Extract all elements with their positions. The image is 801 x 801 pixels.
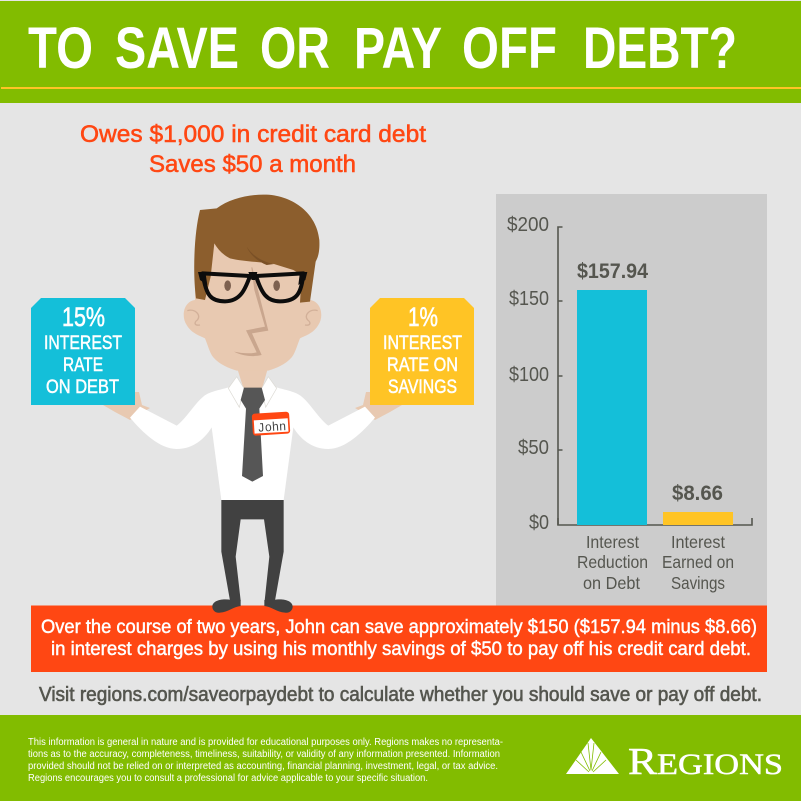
title: [28, 16, 737, 81]
disclaimer: This information is general in nature and is provided for educational purposes only. Regions makes no representa-: [28, 737, 503, 748]
tag: debt interest rate: RATE: [63, 355, 103, 376]
disclaimer: tions as to the accuracy, completeness, timeliness, suitability, or validity of any information presented. Information: [28, 749, 500, 760]
chart axes: [558, 227, 752, 525]
category label: savings: [662, 532, 734, 593]
hands: [103, 392, 402, 420]
title: OR: [260, 16, 330, 81]
nose and smile: [234, 267, 268, 356]
trousers: [221, 500, 284, 601]
glasses: [198, 272, 307, 301]
eyes: [224, 280, 280, 291]
chart axis labels: $100: [509, 364, 549, 386]
bar: interest earned on savings: $8.66: [672, 482, 723, 505]
subtitle: John's situation: Owes $1,000 in credit card debt: [80, 121, 426, 148]
callout band: conclusion: in interest charges by using his monthly savings of $50 to pay off his credit card debt.: [51, 638, 751, 660]
chart axis labels: $50: [518, 437, 549, 459]
footer: [0, 715, 801, 801]
chart axis labels: $200: [507, 214, 549, 236]
subtitle: John's situation: [80, 121, 426, 178]
tag: debt interest rate: ON DEBT: [46, 377, 119, 398]
title: DEBT?: [583, 16, 737, 81]
chart axis labels: $0: [529, 512, 549, 534]
bar: interest reduction on debt: [577, 260, 648, 525]
title: OFF: [462, 16, 557, 81]
call to action: Visit regions.com/saveorpaydebt to calculate whether you should save or pay off debt.: [39, 684, 762, 706]
tag: savings interest rate: 1%: [408, 302, 438, 332]
logo: Regions: REGIONS: [628, 741, 783, 783]
category label: debt: [577, 532, 648, 593]
bar: interest earned on savings: [663, 482, 733, 525]
tag: savings interest rate: RATE ON: [387, 355, 458, 376]
name badge: John: [257, 419, 287, 436]
tie: [241, 388, 265, 482]
header banner: [0, 1, 801, 103]
bar: interest reduction on debt: $157.94: [577, 260, 648, 283]
tag: savings interest rate: INTEREST: [383, 333, 462, 354]
ear details: [187, 310, 318, 325]
shirt: [130, 387, 375, 500]
hair: [194, 195, 319, 303]
category label: savings: Savings: [671, 573, 725, 593]
category label: debt: Interest: [586, 532, 639, 552]
title: PAY: [354, 16, 442, 81]
tag: savings interest rate: SAVINGS: [388, 377, 457, 398]
chart axis labels: $150: [509, 288, 549, 310]
hair shadow: [247, 247, 274, 265]
subtitle: John's situation: Saves $50 a month: [149, 151, 356, 178]
neck: [237, 367, 268, 390]
logo: Regions: [566, 738, 783, 783]
shoes: [212, 599, 293, 613]
callout band: conclusion: Over the course of two years, John can save approximately $150 ($157.94 minus $8.66): [41, 616, 757, 638]
disclaimer: Regions encourages you to consult a professional for advice applicable to your specific situation.: [28, 773, 428, 784]
panel: bar chart: [496, 194, 767, 606]
callout band: conclusion: [31, 606, 767, 672]
tag: savings interest rate: [370, 298, 474, 405]
illustration: John: [103, 195, 402, 613]
collar: [228, 377, 277, 407]
face with ears: [184, 233, 321, 371]
tag: debt interest rate: INTEREST: [44, 333, 122, 354]
name badge: [252, 412, 290, 436]
disclaimer: [28, 737, 503, 784]
category label: savings: Interest: [671, 532, 725, 552]
category label: savings: Earned on: [662, 552, 734, 572]
chart axis labels: [507, 214, 549, 534]
title: SAVE: [115, 16, 239, 81]
category label: debt: on Debt: [583, 573, 640, 593]
category label: debt: Reduction: [577, 552, 648, 572]
disclaimer: provided should not be relied on or interpreted as accounting, financial planning, investment, legal, or tax advice.: [28, 761, 498, 772]
tag: debt interest rate: 15%: [62, 302, 105, 332]
tag: debt interest rate: [31, 298, 135, 405]
title: TO: [28, 16, 93, 81]
